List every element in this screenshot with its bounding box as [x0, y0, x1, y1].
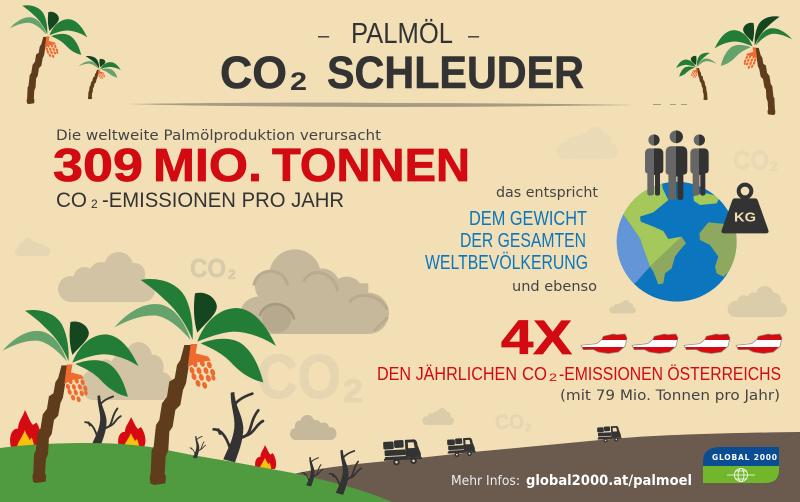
watermark CO2 upper right: CO	[733, 145, 769, 175]
cloud: small lower	[290, 415, 337, 440]
palm: top right large	[715, 16, 792, 115]
headline number	[53, 139, 470, 191]
brush line	[127, 103, 687, 107]
watermark CO2 upper right: 2	[770, 158, 778, 174]
title: 2	[290, 68, 307, 96]
footer link: global2000.at/palmoel	[526, 473, 692, 489]
red statement: 2	[549, 372, 557, 384]
burnt tree: left	[85, 395, 121, 446]
brown hill	[293, 432, 800, 502]
watermark CO2 left: CO	[190, 253, 226, 283]
cloud: upper right	[557, 127, 618, 159]
palm: top left small	[79, 56, 121, 99]
emissions subtitle: CO	[56, 189, 87, 212]
cloud: large grey	[240, 249, 389, 334]
green hill	[0, 443, 392, 502]
watermark CO2 left: 2	[228, 266, 236, 282]
watermark CO2 bottom: 2	[525, 422, 531, 434]
watermark CO2 bottom: CO	[495, 411, 524, 434]
truck 1	[383, 439, 422, 466]
flame: right	[255, 445, 276, 469]
emissions subtitle: -EMISSIONEN PRO JAHR	[102, 189, 344, 212]
cloud: small right	[609, 300, 636, 314]
4X label: 4X	[501, 312, 572, 365]
title: SCHLEUDER	[327, 47, 584, 98]
cloud: right	[728, 286, 787, 317]
footer link: Mehr Infos:	[451, 474, 520, 489]
flame: left	[10, 410, 42, 448]
icon: kg weight: KG	[734, 210, 756, 225]
headline number: MIO.	[153, 139, 262, 191]
title: –	[318, 25, 330, 47]
emissions subtitle: 2	[91, 197, 98, 211]
headline number: 309	[53, 139, 143, 191]
footer link	[451, 473, 692, 489]
cloud: small bottom	[422, 408, 454, 425]
flame: middle	[118, 417, 145, 447]
cloud: faint left	[15, 238, 51, 256]
intro text: Die weltweite Palmölproduktion verursacht	[56, 128, 382, 144]
text: und ebenso: und ebenso	[512, 279, 597, 295]
title: –	[468, 25, 480, 47]
blue statement: DEM GEWICHT	[469, 208, 587, 230]
icon: kg weight	[721, 185, 769, 233]
burnt tree: large	[214, 392, 263, 462]
title: CO	[220, 47, 287, 98]
watermark CO2 large: 2	[343, 373, 363, 409]
red statement: CO	[522, 364, 547, 384]
logo: Global 2000: GLOBAL 2000	[712, 453, 777, 462]
blue statement	[425, 208, 588, 274]
watermark CO2 large: CO	[257, 343, 341, 412]
burnt tree: hill edge small	[302, 457, 323, 487]
blue statement: WELTBEVÖLKERUNG	[425, 252, 588, 274]
icon: three people	[645, 130, 709, 200]
palm: foreground left	[3, 310, 139, 483]
burnt tree: small	[190, 436, 206, 458]
truck 2	[447, 438, 476, 457]
headline number: TONNEN	[272, 139, 470, 191]
cloud: behind palm	[81, 342, 173, 400]
icon: globe	[616, 182, 737, 302]
note: 79 Mio. Tonnen: (mit 79 Mio. Tonnen pro Jahr)	[560, 388, 780, 404]
palm: foreground centre	[114, 279, 276, 485]
palm: top right small	[676, 53, 716, 100]
icons: austria flags	[581, 334, 782, 354]
text: das entspricht: das entspricht	[496, 185, 599, 201]
title: PALMÖL	[351, 18, 453, 50]
blue statement: DER GESAMTEN	[460, 230, 586, 252]
burnt tree: hill edge	[330, 450, 361, 495]
logo: Global 2000	[703, 447, 779, 483]
palm: top left large	[10, 5, 87, 104]
cloud: upper left grey	[58, 252, 155, 302]
truck 3	[597, 426, 622, 443]
red statement: DEN JÄHRLICHEN	[377, 364, 517, 384]
red statement	[377, 364, 781, 384]
title	[220, 18, 584, 98]
